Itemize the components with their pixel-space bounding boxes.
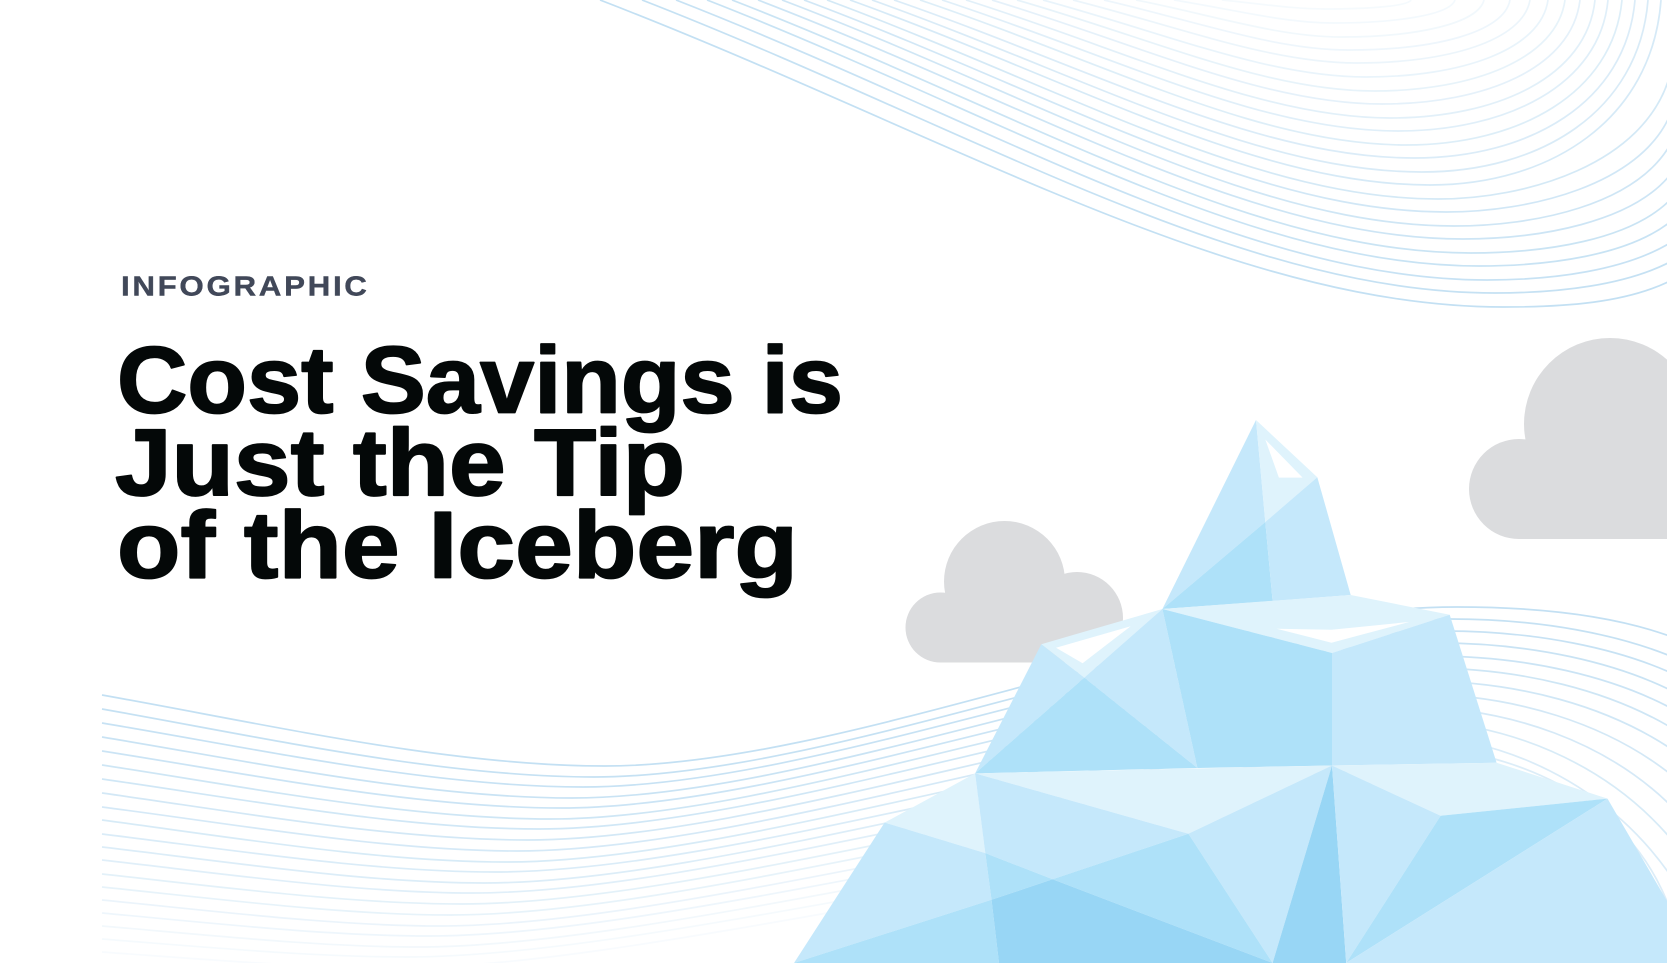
iceberg: middle tier [975, 595, 1497, 773]
iceberg: spire [1162, 420, 1351, 609]
iceberg illustration [794, 420, 1667, 963]
title: Cost Savings is [117, 327, 843, 433]
cloud: right [1469, 338, 1667, 539]
eyebrow label: INFOGRAPHIC [121, 271, 367, 302]
title: of the Iceberg [117, 493, 798, 599]
iceberg: base tier [794, 763, 1667, 963]
title: Just the Tip [115, 410, 685, 516]
title [115, 327, 843, 599]
cloud: left [906, 521, 1123, 664]
